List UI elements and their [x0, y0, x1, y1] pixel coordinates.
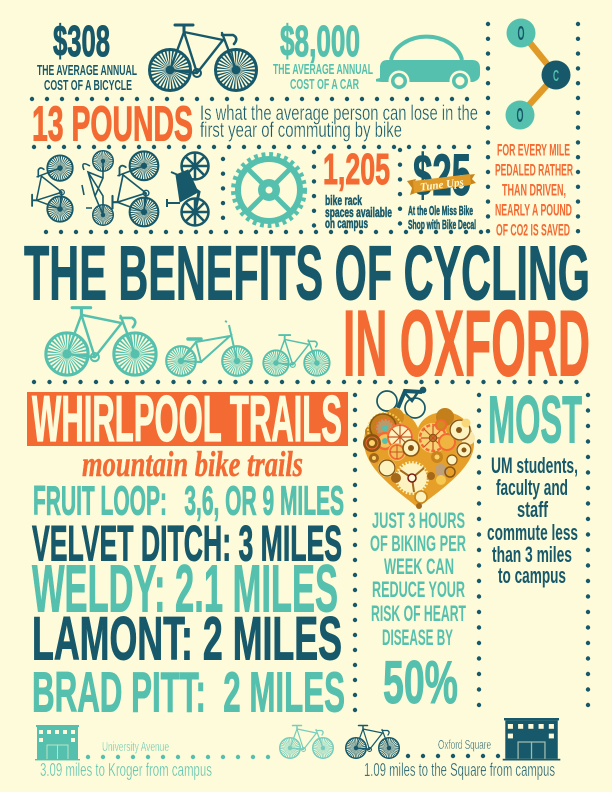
- stat: most commute less than three miles: to campus: [498, 563, 566, 588]
- list: trail distances: LAMONT: 2 MILES: [32, 604, 342, 672]
- route: Kroger: [40, 739, 272, 780]
- route: Kroger: 3.09 miles to Kroger from campus: [40, 760, 212, 780]
- text: heart disease statistic: RISK OF HEART: [371, 601, 466, 626]
- stat: bike rack spaces: on campus: [325, 215, 368, 231]
- stat: most commute less than three miles: faculty and: [496, 475, 568, 500]
- stat: average annual cost of a car: $8,000: [280, 17, 360, 66]
- icon: teal gear: [234, 154, 304, 226]
- text: weight loss description: [200, 102, 478, 142]
- text: heart disease statistic: WEEK CAN: [384, 554, 454, 579]
- route: Oxford Square: Oxford Square: [438, 737, 491, 752]
- stat: twenty five dollar tune up: [407, 143, 476, 232]
- stat: bike rack spaces: bike rack: [325, 192, 362, 208]
- stat: twenty five dollar tune up: Shop with Bike Decal: [408, 218, 476, 232]
- stat: bike rack spaces: 1,205: [323, 145, 390, 194]
- small road bicycle: [263, 335, 330, 376]
- icons: three teal bicycles: [46, 308, 330, 376]
- BMX bicycle: [166, 321, 252, 376]
- text: heart disease statistic: OF BIKING PER: [370, 531, 466, 556]
- text: heart disease statistic: [370, 508, 466, 716]
- text: heart disease statistic: JUST 3 HOURS: [372, 508, 465, 533]
- text: weight loss description: Is what the average person can lose in the: [200, 102, 478, 125]
- stat: average annual cost of a car: THE AVERAGE ANNUAL: [273, 62, 373, 78]
- icon: dark bicycle: [346, 726, 399, 758]
- stat: 13 pounds heading: 13 POUNDS: [32, 98, 193, 152]
- list: trail distances: BRAD PITT: 2 MILES: [32, 660, 345, 724]
- list: trail distances: [32, 478, 345, 724]
- bicycle three: [112, 151, 158, 226]
- text: weight loss description: first year of commuting by bike: [200, 119, 402, 142]
- stat: bike rack spaces: spaces available: [325, 204, 392, 220]
- list: trail distances: WELDY: 2.1 MILES: [32, 552, 338, 626]
- icon: four parked bicycles: [32, 151, 208, 226]
- bicycle one: [32, 155, 73, 222]
- icon: cyclist: [377, 388, 426, 418]
- icon: road bicycle: [150, 25, 256, 90]
- tandem bicycle: [82, 151, 113, 225]
- stat: bike rack spaces: [323, 145, 392, 231]
- text: CO2 saved per mile: [495, 140, 573, 240]
- icon: heart made of gears: [363, 408, 475, 509]
- stat: average annual cost of a car: COST OF A CAR: [290, 77, 359, 93]
- stat: most commute less than three miles: [487, 382, 582, 588]
- stat: average annual cost of a bicycle: COST OF A BICYCLE: [44, 78, 132, 94]
- text: heart disease statistic: DISEASE BY: [382, 625, 453, 650]
- stat: average annual cost of a bicycle: THE AVERAGE ANNUAL: [37, 63, 137, 79]
- stat: twenty five dollar tune up: $25: [413, 143, 471, 208]
- icon: car: [376, 37, 480, 92]
- stat: average annual cost of a car: [273, 17, 373, 93]
- text: heart disease statistic: REDUCE YOUR: [372, 577, 465, 602]
- icon: CO2 molecule: [506, 18, 570, 130]
- icon: dark building: [503, 718, 560, 760]
- text: heart disease statistic: 50%: [383, 649, 458, 716]
- stat: average annual cost of a bicycle: $308: [53, 17, 110, 66]
- large bicycle: [46, 308, 156, 375]
- stat: most commute less than three miles: staff: [517, 497, 548, 522]
- ribbon: tune ups: Tune Ups: [419, 176, 464, 194]
- icon: CO2 molecule: O: [518, 23, 524, 45]
- stat: average annual cost of a bicycle: [37, 17, 137, 94]
- route: Oxford Square: [364, 737, 555, 780]
- subheading: mountain bike trails: mountain bike trails: [82, 444, 303, 484]
- route: Kroger: University Avenue: [102, 739, 169, 754]
- stat: twenty five dollar tune up: At the Ole Miss Bike: [408, 204, 473, 218]
- icon: CO2 molecule: O: [516, 105, 524, 127]
- icon: CO2 molecule: C: [553, 68, 559, 85]
- bicycle four with solid frame: [167, 152, 208, 226]
- banner: Whirlpool Trails: [27, 382, 348, 455]
- icon: teal building: [35, 725, 80, 760]
- icon: teal bicycle: [280, 726, 333, 758]
- list: trail distances: VELVET DITCH: 3 MILES: [32, 516, 342, 572]
